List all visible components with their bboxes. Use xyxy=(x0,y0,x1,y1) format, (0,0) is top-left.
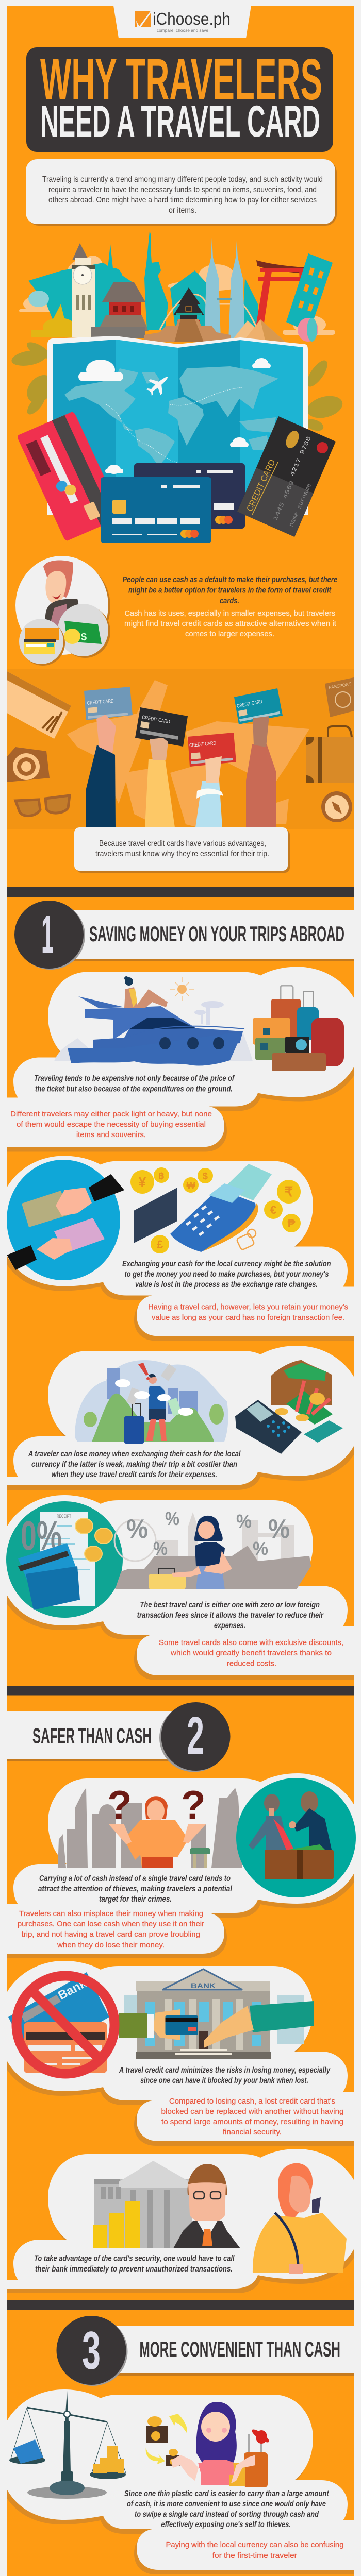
portholes xyxy=(159,1037,224,1049)
leaning tower xyxy=(286,253,333,332)
text block 2C: To take advantage of the card's security, one would have to call xyxy=(34,2255,235,2263)
text block 3A: for the first-time traveler xyxy=(212,2551,297,2560)
divider bar 1 xyxy=(7,887,354,897)
teal domed tower xyxy=(28,244,139,330)
coins: ฿ xyxy=(158,1171,165,1181)
percent signs: % xyxy=(153,1538,168,1559)
flight path xyxy=(106,387,242,466)
illustration: woman with bubbles xyxy=(15,556,110,666)
receipt label: RECEIPT xyxy=(57,1514,71,1519)
red card xyxy=(17,411,123,541)
advantages text: Because travel credit cards have various advantages, xyxy=(99,839,266,848)
coins: ₹ xyxy=(285,1184,293,1199)
section heading 2: 2 xyxy=(187,1706,204,1766)
cash icon: $ xyxy=(81,632,87,643)
illustration: card ban sign xyxy=(8,1972,114,2074)
mid deck xyxy=(93,1028,243,1051)
text block 3A: effectively exposing one's self to thieves. xyxy=(161,2520,291,2529)
upper hand and bills xyxy=(22,1174,124,1227)
text block: cash vs travel cards: Cash has its uses, especially in smaller expenses, but travelers xyxy=(125,609,335,618)
illustration: yacht xyxy=(54,976,253,1066)
thief xyxy=(289,1791,332,1855)
header logo tab xyxy=(113,6,251,38)
small suitcase xyxy=(190,1848,210,1868)
coin stacks xyxy=(93,2201,140,2248)
woman xyxy=(43,560,79,639)
coins xyxy=(130,1167,301,1253)
illustration: raised hands with credit cards xyxy=(7,671,354,829)
text block 1C: currency if the latter is weak, making their trip a bit costlier than xyxy=(31,1460,237,1469)
hull xyxy=(68,1031,243,1066)
coins: € xyxy=(270,1204,276,1216)
palm tree xyxy=(194,1001,224,1025)
arm: light blue sleeve: CREDIT CARD xyxy=(189,741,216,749)
text block 1B xyxy=(122,1260,348,1322)
lower hand and bills xyxy=(7,1218,105,1270)
text block 2A xyxy=(18,1874,232,1950)
coins: ₱ xyxy=(288,1217,296,1230)
black pagoda xyxy=(173,287,204,330)
mayan pyramid xyxy=(144,319,231,342)
text block 2A: target for their crimes. xyxy=(99,1895,172,1904)
text block 2C: their bank immediately to prevent unauthorized transactions. xyxy=(35,2265,233,2274)
continents xyxy=(64,366,278,466)
logo check mark xyxy=(135,10,153,28)
divider bar 2 xyxy=(7,1686,354,1695)
city blocks xyxy=(107,1368,198,1417)
logo tagline: compare, choose and save xyxy=(157,28,209,33)
text block 2B: financial security. xyxy=(223,2128,282,2137)
illustration: traveler with flying money xyxy=(75,1360,228,1444)
coins on the scale xyxy=(93,2446,124,2473)
text block 3A: Paying with the local currency can also be confusing xyxy=(166,2540,343,2549)
illustration: folded world map xyxy=(47,336,308,515)
plane xyxy=(143,370,173,400)
golden temple xyxy=(31,304,85,337)
text block 1D: transaction fees since it allows the traveler to reduce their xyxy=(137,1611,324,1620)
advantages text: travelers must know why they're essential for their trip. xyxy=(95,850,269,858)
map clouds xyxy=(78,358,271,474)
base steps xyxy=(136,2049,271,2059)
coins: ¥ xyxy=(139,1174,146,1190)
question marks: ? xyxy=(107,1782,132,1827)
section heading 3 xyxy=(57,2316,354,2386)
text block: cash vs travel cards: cards. xyxy=(220,597,239,605)
intro text xyxy=(42,175,323,215)
arm: navy sleeve xyxy=(84,687,133,827)
door xyxy=(199,2031,208,2050)
percent signs xyxy=(126,1508,290,1559)
intro text: others abroad. One might have a hard time determining how to pay for either services xyxy=(48,196,317,205)
illustration: card terminal and currencies xyxy=(130,1164,301,1253)
red pagoda xyxy=(98,282,149,338)
luggage xyxy=(229,2434,268,2487)
arm: navy sleeve: CREDIT CARD xyxy=(87,698,114,706)
illustration: gray bank, coins and banker xyxy=(93,2161,347,2274)
text block 1D: reduced costs. xyxy=(227,1659,276,1668)
black card: 1445 4569 xyxy=(272,480,296,522)
text block 2B: blocked can be replaced with another without having xyxy=(161,2107,343,2116)
cloud panel 1B xyxy=(5,1156,361,1341)
cloud panel 1C xyxy=(0,1346,356,1490)
wallet xyxy=(265,1844,334,1879)
text block 3A xyxy=(124,2489,343,2560)
flying bills xyxy=(115,1364,193,1416)
boarding ticket xyxy=(7,671,71,739)
text block 1B: value is lost in the process as the exchange rate changes. xyxy=(135,1280,318,1289)
illustration: pickpocket in teal circle xyxy=(236,1778,356,1897)
black card: CREDIT CARD xyxy=(244,458,277,513)
wallets and arrows xyxy=(146,2414,187,2466)
columns xyxy=(165,1999,243,2050)
text block 2A: purchases. One can lose cash when they use it on their xyxy=(18,1920,204,1928)
mountains and bridge xyxy=(160,270,258,330)
exclamation mark xyxy=(138,1363,150,1380)
red hat xyxy=(250,2428,271,2444)
arm: terracotta sleeve: CREDIT CARD xyxy=(236,699,263,709)
windows xyxy=(145,2002,261,2046)
coins xyxy=(275,1393,325,1421)
percent signs: % xyxy=(268,1514,290,1544)
arm with card xyxy=(119,2009,180,2040)
torii gate xyxy=(255,260,319,330)
section heading 1 xyxy=(14,901,354,970)
section heading 3: 3 xyxy=(82,2321,101,2381)
text block 2A: Travelers can also misplace their money when making xyxy=(19,1909,203,1918)
camera xyxy=(7,747,50,782)
petronas towers xyxy=(204,238,245,340)
passport: PASSPORT xyxy=(329,681,352,690)
text block 2B: Compared to losing cash, a lost credit card that's xyxy=(169,2097,335,2106)
compass xyxy=(321,791,352,822)
gold coins xyxy=(75,1518,112,1562)
text block 1D: expenses. xyxy=(214,1621,245,1630)
railing xyxy=(126,1026,244,1038)
percent signs: % xyxy=(165,1508,179,1529)
illustration: landmark skyline xyxy=(19,231,335,343)
cloud panel 3A xyxy=(5,2389,361,2574)
prohibition sign xyxy=(17,1976,114,2074)
blue card xyxy=(8,1972,109,2062)
black card: name surname xyxy=(288,483,313,528)
text block 1A: Traveling tends to be expensive not only because of the price of xyxy=(34,1074,235,1083)
cloud panel 2B xyxy=(5,1961,361,2146)
cloud panel 1A xyxy=(0,967,356,1152)
intro text: require a traveler to have the necessary funds to spend on items, souvenirs, food, and xyxy=(48,185,317,194)
woman xyxy=(108,1796,206,1868)
hot air balloon xyxy=(298,318,318,342)
text block 2A: Carrying a lot of cash instead of a single travel card tends to xyxy=(39,1874,231,1883)
intro text: or items. xyxy=(169,206,196,215)
illustration: confused woman in city xyxy=(58,1782,242,1868)
arm: terracotta sleeve xyxy=(234,688,283,827)
text block 1D: which would greatly benefit travelers thanks to xyxy=(170,1649,332,1657)
coins: $ xyxy=(203,1171,208,1181)
text block 2A: attract the attention of thieves, making travelers a potential xyxy=(38,1885,232,1893)
orange card xyxy=(24,2022,107,2073)
illustration: bank building: BANK xyxy=(191,1981,216,1990)
landmarks xyxy=(157,1512,294,1571)
pale world map xyxy=(67,680,309,829)
terminal xyxy=(235,1400,302,1454)
question marks: ? xyxy=(181,1782,206,1827)
illustration: palm leaves xyxy=(10,339,345,433)
cabin xyxy=(85,1006,198,1040)
sunbathing woman xyxy=(124,976,168,1008)
text block 2B: since one can have it blocked by your bank when lost. xyxy=(140,2076,308,2085)
percent signs: % xyxy=(236,1511,252,1532)
intro box xyxy=(26,159,337,226)
blue card: Bank xyxy=(56,1976,89,2003)
section heading 1: 1 xyxy=(41,905,54,964)
text block 1A: of them would escape the necessity of buying essential xyxy=(17,1120,206,1129)
card handed over xyxy=(165,2015,198,2035)
illustration: city skyline with woman xyxy=(114,1508,311,1589)
woman xyxy=(171,2402,255,2485)
advantages text xyxy=(95,839,269,858)
red arrows xyxy=(297,1381,330,1414)
ferris wheel xyxy=(114,1520,156,1561)
egyptian pyramids xyxy=(231,319,286,343)
green hills xyxy=(92,1394,214,1442)
sunglasses xyxy=(15,795,70,816)
sun xyxy=(170,977,194,1001)
pale teal cloud xyxy=(28,291,49,307)
section heading 2 xyxy=(7,1702,230,1772)
illustration: luggage pile xyxy=(253,986,344,1071)
man xyxy=(146,1374,167,1441)
heading text: SAFER THAN CASH xyxy=(32,1724,152,1748)
logo wordmark: iChoose.ph xyxy=(153,9,231,28)
low skyline xyxy=(115,1546,311,1589)
navy card xyxy=(134,463,245,529)
percent signs: % xyxy=(253,1538,268,1559)
secure lock xyxy=(236,1229,256,1250)
black card xyxy=(237,416,336,537)
cloud panel 1D xyxy=(5,1495,361,1680)
teal card xyxy=(304,1420,343,1443)
victim xyxy=(249,1794,294,1855)
woman on phone xyxy=(253,2163,347,2274)
card reader icon xyxy=(24,628,59,654)
text block 1B: value as long as your card has no foreign transaction fee. xyxy=(152,1313,344,1322)
terminal keys xyxy=(186,1205,220,1236)
text block 3A: to swipe a single card instead of sorting through cash and xyxy=(135,2510,319,2519)
building body xyxy=(137,1989,270,2052)
trees xyxy=(84,1404,224,1427)
divider bar 3 xyxy=(7,2300,354,2310)
banker xyxy=(173,2164,240,2248)
text block 2B: to spend large amounts of money, resulting in having xyxy=(161,2117,343,2126)
blue cards xyxy=(18,1543,78,1589)
coins: £ xyxy=(157,1238,163,1251)
illustration: bank building xyxy=(119,1969,314,2059)
intro text: Traveling is currently a trend among many different people today, and such activity would xyxy=(42,175,323,184)
peach clouds xyxy=(19,256,335,335)
arm: cream sleeve: CREDIT CARD xyxy=(141,715,171,725)
passport xyxy=(325,677,354,717)
cloud panel 2C xyxy=(0,2149,356,2293)
text block 1D: The best travel card is either one with zero or low foreign xyxy=(140,1601,320,1609)
text block: cash vs travel cards: comes to larger expenses. xyxy=(185,630,274,638)
text block 1A: items and souvenirs. xyxy=(76,1130,146,1139)
illustration: cash exchange xyxy=(7,1160,124,1280)
suitcase xyxy=(306,726,354,783)
bank xyxy=(94,2161,192,2248)
text block 2B xyxy=(119,2066,343,2137)
illustration: balance scale xyxy=(9,2391,126,2499)
woman xyxy=(172,1516,232,1589)
arm: light blue sleeve xyxy=(188,733,236,827)
stone wall xyxy=(91,327,145,338)
text block 2C xyxy=(34,2255,235,2274)
coins: ₩ xyxy=(187,1180,195,1191)
text block 1A: Different travelers may either pack light or heavy, but none xyxy=(10,1110,212,1118)
text block 2A: when they do lose their money. xyxy=(57,1941,165,1950)
suitcase xyxy=(149,1569,186,1589)
text block: cash vs travel cards xyxy=(123,575,337,638)
cloud panel 2A xyxy=(0,1773,356,1958)
text block 1B: Having a travel card, however, lets you retain your money's xyxy=(148,1302,348,1312)
illustration: confused woman with wallets xyxy=(146,2402,271,2487)
fin xyxy=(78,996,124,1008)
cash icon xyxy=(64,621,102,644)
darker scene band xyxy=(7,669,354,829)
statue of liberty xyxy=(144,231,168,330)
text block 1D: Some travel cards also come with exclusive discounts, xyxy=(159,1638,343,1647)
text block 1D xyxy=(137,1601,343,1668)
black card: 4217 9788 xyxy=(289,435,313,478)
suitcase xyxy=(124,1404,144,1444)
arm receiving xyxy=(204,2001,314,2048)
illustration: receipt and zero percent xyxy=(6,1501,123,1618)
card on the scale xyxy=(13,2439,43,2464)
big ben xyxy=(72,243,95,337)
text block 1A: the ticket but also because of the expenditures on the ground. xyxy=(35,1085,233,1093)
illustration: credit cards over the map xyxy=(17,411,336,543)
blue card xyxy=(101,477,211,543)
text block 1C: when they use travel credit cards for their expenses. xyxy=(52,1470,217,1479)
text block 2A: trip, and not having a travel card can prove troubling xyxy=(22,1930,200,1939)
title panel xyxy=(26,47,333,152)
text block 1C: A traveler can lose money when exchanging their cash for the local xyxy=(28,1450,241,1459)
text block 1C xyxy=(28,1450,241,1479)
text block 1A xyxy=(10,1074,235,1139)
illustration: wallet and card terminal xyxy=(235,1360,343,1454)
advantages box xyxy=(74,827,290,873)
arm: cream sleeve xyxy=(135,707,188,827)
text block: cash vs travel cards: might find travel credit cards as attractive alternatives when it xyxy=(124,619,337,628)
percent signs: % xyxy=(126,1514,148,1544)
question marks xyxy=(107,1782,206,1827)
zero percent: 0% xyxy=(21,1513,62,1558)
